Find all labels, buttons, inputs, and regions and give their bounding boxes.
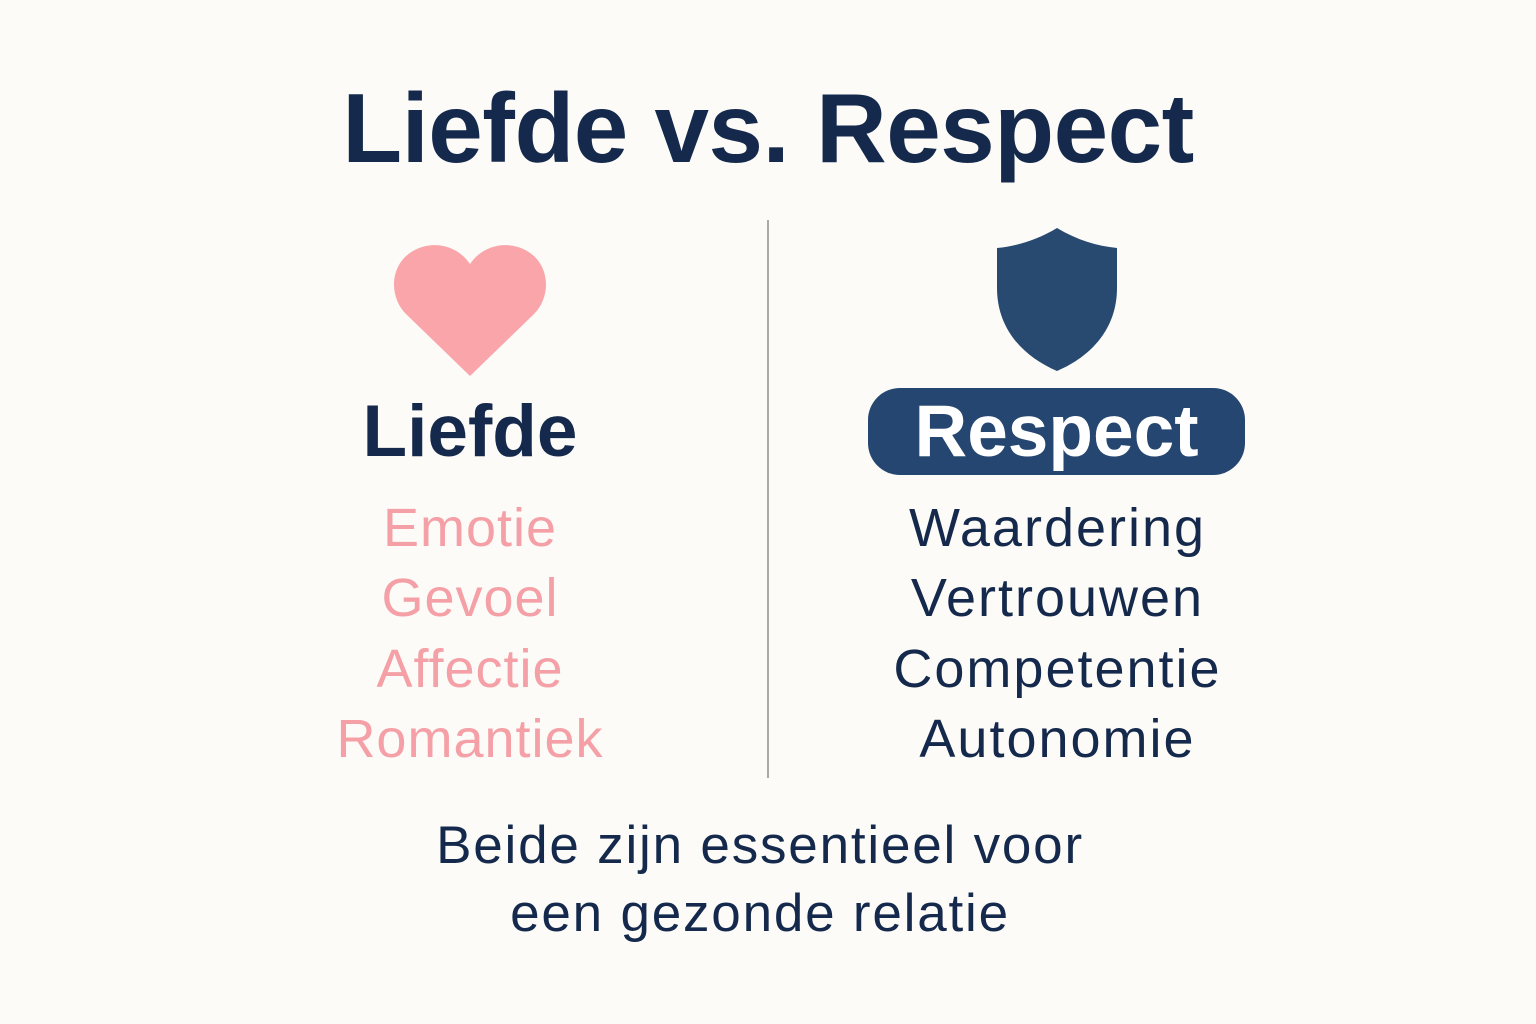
- list: respect items: Vertrouwen: [911, 568, 1204, 628]
- heading: Liefde: Liefde: [362, 391, 577, 472]
- footer text: Beide zijn essentieel voor: [436, 816, 1084, 875]
- list: liefde items: Romantiek: [336, 709, 604, 769]
- list: respect items: Competentie: [893, 639, 1222, 699]
- list: liefde items: Emotie: [383, 498, 557, 558]
- footer text: [436, 816, 1084, 943]
- panel: liefde: [336, 245, 604, 769]
- divider: [767, 220, 769, 778]
- icon: heart: [394, 245, 546, 376]
- icon: shield: [997, 228, 1117, 371]
- panel: respect: [868, 228, 1245, 769]
- footer text: een gezonde relatie: [510, 884, 1010, 943]
- list: respect items: Waardering: [909, 498, 1206, 558]
- list: liefde items: Gevoel: [381, 568, 559, 628]
- list: liefde items: [336, 498, 604, 769]
- list: respect items: [893, 498, 1222, 769]
- heading: Respect pill: Respect: [914, 391, 1198, 472]
- list: liefde items: Affectie: [376, 639, 564, 699]
- list: respect items: Autonomie: [919, 709, 1196, 769]
- title: Liefde vs. Respect: [342, 73, 1194, 183]
